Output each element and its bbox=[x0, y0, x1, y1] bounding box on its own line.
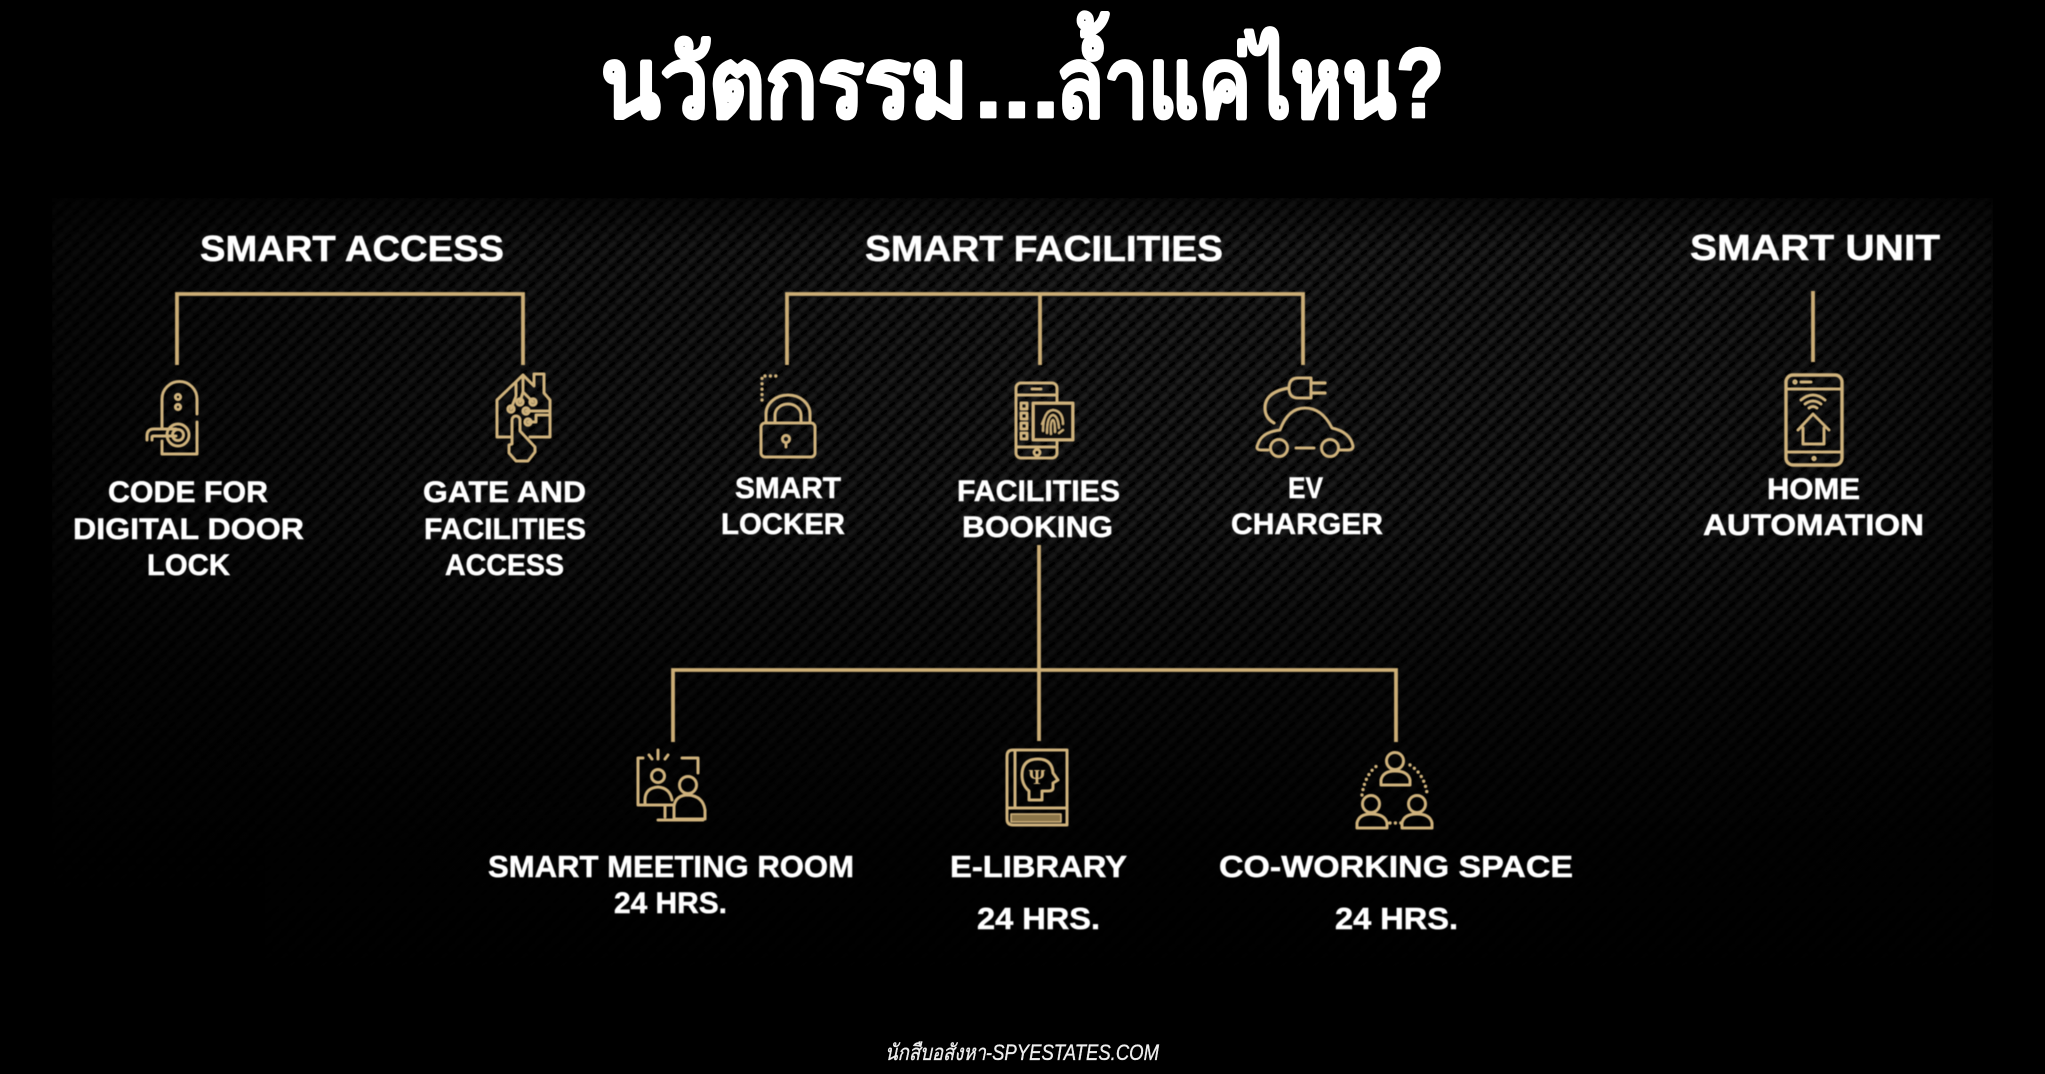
label: co-working space 24 hrs bbox=[1219, 849, 1573, 936]
label: gate and facilities access: GATE AND bbox=[423, 476, 586, 509]
label: gate and facilities access: FACILITIES bbox=[424, 513, 586, 546]
label: facilities booking: BOOKING bbox=[962, 511, 1113, 544]
title: นวัตกรรม bbox=[601, 28, 968, 138]
panel: smart access bbox=[73, 228, 586, 582]
label: smart meeting room 24 hrs bbox=[488, 849, 854, 920]
label: co-working space 24 hrs: CO-WORKING SPACE bbox=[1219, 849, 1573, 884]
label: ev charger: CHARGER bbox=[1231, 508, 1383, 541]
icon: e-library book: Ψ bbox=[1029, 765, 1046, 789]
textured panel background bbox=[54, 198, 1993, 740]
icon: gate and facilities access bbox=[497, 374, 550, 461]
label: code for digital door lock: CODE FOR bbox=[108, 476, 268, 509]
label: facilities booking bbox=[957, 475, 1120, 544]
icon: ev charger bbox=[1257, 378, 1353, 456]
label: smart meeting room 24 hrs: SMART MEETING ROOM bbox=[488, 849, 854, 884]
label: code for digital door lock: DIGITAL DOOR bbox=[73, 513, 304, 546]
heading: smart unit: SMART UNIT bbox=[1690, 227, 1940, 268]
label: code for digital door lock: LOCK bbox=[147, 549, 230, 582]
label: gate and facilities access: ACCESS bbox=[445, 549, 564, 582]
connector: smart facilities bracket bbox=[787, 294, 1303, 365]
label: home automation bbox=[1703, 473, 1924, 542]
title: ... bbox=[975, 31, 1059, 138]
icon: co-working space bbox=[1357, 752, 1432, 828]
icon: facilities booking bbox=[1016, 383, 1073, 458]
label: code for digital door lock bbox=[73, 476, 304, 582]
label: smart locker: LOCKER bbox=[721, 508, 845, 541]
icon: smart locker bbox=[761, 376, 815, 457]
label: gate and facilities access bbox=[423, 476, 586, 582]
label: ev charger bbox=[1231, 472, 1383, 541]
icon: digital door lock bbox=[147, 382, 197, 454]
label: home automation: AUTOMATION bbox=[1703, 509, 1924, 542]
label: e-library 24 hrs bbox=[950, 849, 1127, 936]
connector: facilities booking sub-tree bbox=[673, 545, 1396, 742]
connector: smart access bracket bbox=[177, 294, 523, 365]
footer credit: นักสืบอสังหา-SPYESTATES.COM bbox=[885, 1040, 1160, 1065]
icon: home automation phone bbox=[1786, 375, 1842, 465]
connector: smart unit stem bbox=[1811, 291, 1815, 362]
label: ev charger: EV bbox=[1288, 472, 1323, 505]
heading: smart access: SMART ACCESS bbox=[200, 228, 504, 269]
label: e-library 24 hrs: E-LIBRARY bbox=[950, 849, 1127, 884]
label: smart locker: SMART bbox=[735, 472, 841, 505]
icon: smart meeting room bbox=[638, 750, 705, 820]
label: co-working space 24 hrs: 24 HRS. bbox=[1335, 901, 1458, 936]
heading: smart facilities: SMART FACILITIES bbox=[865, 228, 1223, 269]
panel: smart facilities bbox=[488, 228, 1573, 936]
label: facilities booking: FACILITIES bbox=[957, 475, 1120, 508]
title: ล้ำแค่ไหน? bbox=[1056, 11, 1444, 138]
label: smart meeting room 24 hrs: 24 HRS. bbox=[614, 887, 727, 920]
title bbox=[601, 11, 1444, 138]
panel: smart unit bbox=[1690, 227, 1940, 542]
label: home automation: HOME bbox=[1767, 473, 1860, 506]
icon: e-library book bbox=[1007, 750, 1067, 825]
label: e-library 24 hrs: 24 HRS. bbox=[977, 901, 1100, 936]
label: smart locker bbox=[721, 472, 845, 541]
